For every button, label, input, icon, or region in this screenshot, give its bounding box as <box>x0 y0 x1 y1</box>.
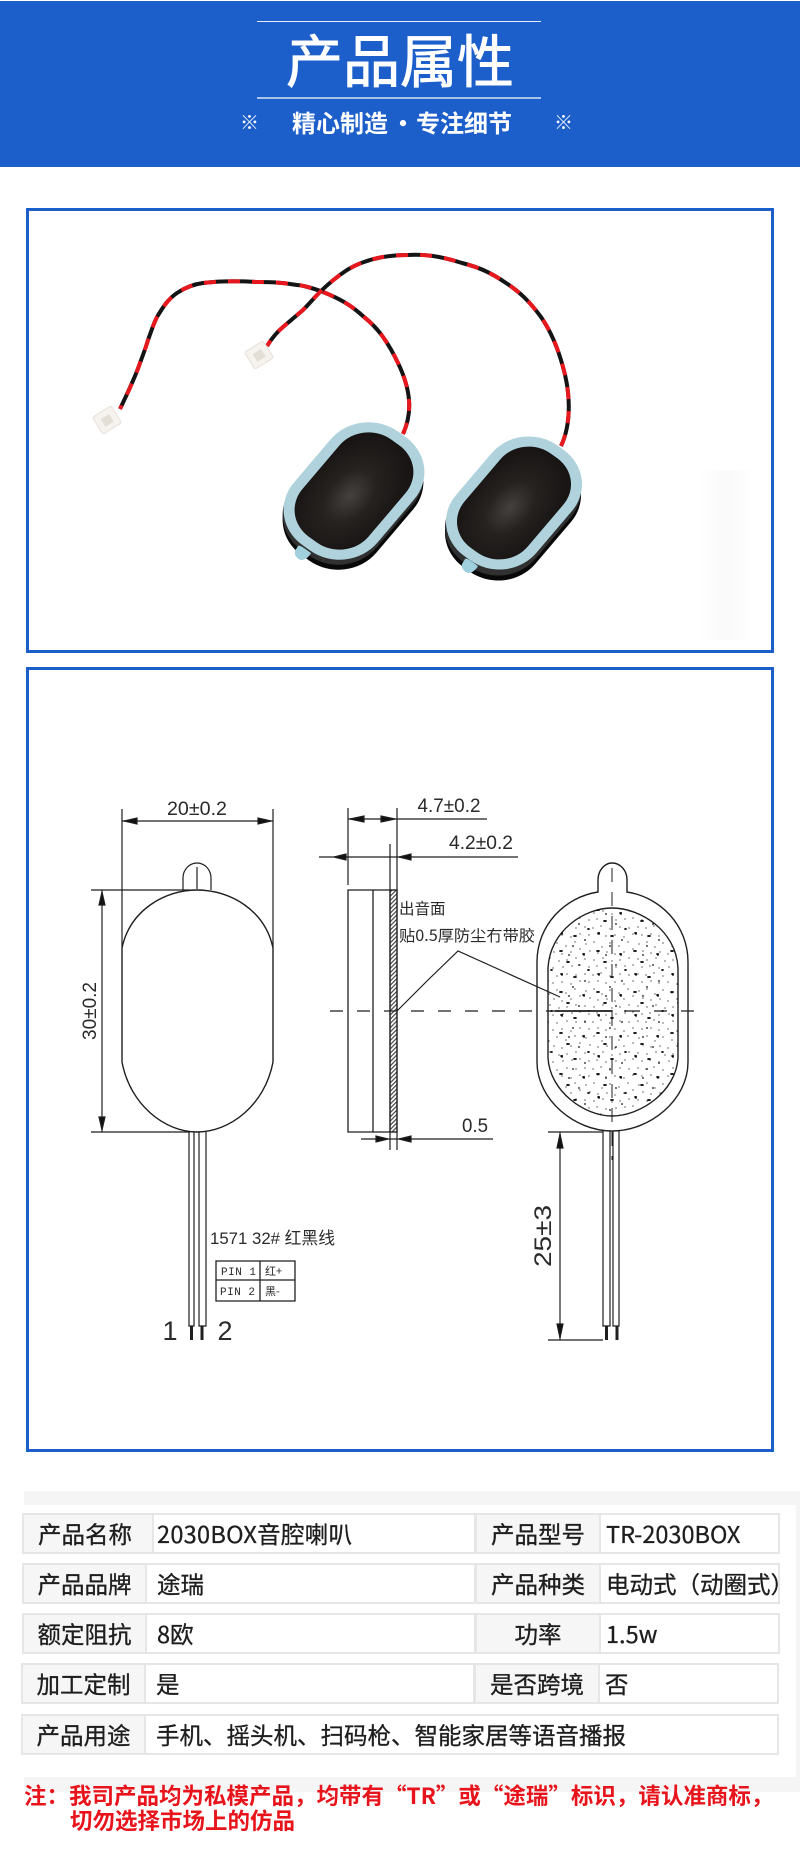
horizontal leader <box>555 1010 612 1012</box>
dimension 4.7 <box>348 796 487 890</box>
row: 品牌 / 种类: 途瑞 <box>157 1566 204 1600</box>
row: 定制 / 跨境: 否 <box>605 1666 628 1700</box>
side view <box>319 796 708 1150</box>
title: 产品属性 <box>286 17 514 99</box>
row: 品牌 / 种类: 产品品牌 <box>38 1566 132 1600</box>
speaker: right <box>426 419 601 598</box>
leader line <box>397 951 560 1011</box>
subtitle: · <box>391 104 415 139</box>
wire: right speaker <box>267 255 569 446</box>
connector: left <box>92 406 122 434</box>
row: 定制 / 跨境 <box>21 1663 779 1704</box>
dimension 4.2 <box>319 833 518 890</box>
subtitle: ※ <box>240 108 259 135</box>
row: 定制 / 跨境: 是 <box>156 1666 180 1700</box>
connector: right <box>244 341 274 369</box>
row: 品牌 / 种类 <box>22 1563 794 1604</box>
title rule bottom <box>257 97 541 99</box>
callout text: 贴0.5厚防尘冇带胶 <box>399 924 535 946</box>
dimension 25: 25±3 <box>530 1205 557 1267</box>
dimension 4.2: 4.2±0.2 <box>449 833 513 854</box>
row: 名称 / 型号: 产品名称 <box>38 1516 132 1550</box>
row: 定制 / 跨境: 是否跨境 <box>490 1666 584 1700</box>
panel: product photo <box>26 208 774 653</box>
row: 阻抗 / 功率: 1.5w <box>606 1616 657 1650</box>
speaker: left <box>263 404 444 588</box>
spec table <box>21 1513 794 1755</box>
back view <box>530 863 688 1340</box>
width dimension <box>122 799 273 948</box>
center line <box>330 1010 708 1012</box>
outer shell <box>537 863 688 1131</box>
dimension 4.7: 4.7±0.2 <box>418 796 480 817</box>
row: 用途 <box>21 1714 779 1755</box>
pin table: PIN 1 <box>221 1267 257 1279</box>
dimension 25 <box>530 1132 603 1340</box>
row: 名称 / 型号 <box>22 1513 780 1554</box>
speckle large dots <box>548 908 678 1116</box>
speckle fill <box>548 908 678 1116</box>
row: 名称 / 型号: 2030BOX音腔喇叭 <box>157 1516 352 1550</box>
height dimension <box>80 890 190 1132</box>
note: counterfeit warning: 切勿选择市场上的仿品 <box>70 1804 295 1836</box>
pin table: 红+ <box>265 1263 282 1279</box>
row: 名称 / 型号: TR-2030BOX <box>606 1516 740 1550</box>
row: 品牌 / 种类: 产品种类 <box>491 1566 585 1600</box>
dimension 0.5 <box>361 1116 493 1150</box>
solder tab <box>183 863 211 890</box>
height dimension: 30±0.2 <box>80 982 101 1040</box>
header banner <box>0 1 800 167</box>
front view <box>80 799 335 1346</box>
row: 名称 / 型号: 产品型号 <box>491 1516 585 1550</box>
table white area <box>0 1505 796 1777</box>
pin numbers <box>162 1316 233 1346</box>
lead wires <box>603 1131 619 1326</box>
table background band <box>24 1491 800 1792</box>
dimension 0.5: 0.5 <box>462 1116 488 1137</box>
callout text: 出音面 <box>399 897 446 919</box>
row: 阻抗 / 功率: 8欧 <box>157 1616 194 1650</box>
width dimension: 20±0.2 <box>167 799 227 820</box>
speaker outline <box>122 890 273 1132</box>
row: 用途: 手机、摇头机、扫码枪、智能家居等语音播报 <box>156 1717 626 1751</box>
pin table <box>216 1261 295 1301</box>
wire: left speaker <box>120 281 409 434</box>
pin table: 黑- <box>265 1283 280 1299</box>
subtitle <box>240 104 573 139</box>
subtitle: 精心制造 <box>292 104 388 139</box>
title rule top <box>257 21 541 22</box>
pin table: PIN 2 <box>220 1287 256 1299</box>
row: 阻抗 / 功率 <box>22 1613 780 1654</box>
pin numbers: 2 <box>217 1316 233 1346</box>
note: counterfeit warning: 注：我司产品均为私模产品，均带有“TR”或“途瑞”标识，请认准商标， <box>24 1779 773 1811</box>
note: counterfeit warning <box>24 1779 773 1836</box>
subtitle: ※ <box>554 108 573 135</box>
pin numbers: 1 <box>162 1316 178 1346</box>
lead wires <box>189 1132 206 1326</box>
vertical center line <box>611 868 613 1160</box>
callout text <box>399 897 535 946</box>
row: 定制 / 跨境: 加工定制 <box>36 1666 130 1700</box>
row: 阻抗 / 功率: 功率 <box>514 1616 562 1650</box>
wire label: 1571 32# 红黑线 <box>210 1229 335 1248</box>
row: 品牌 / 种类: 电动式（动圈式） <box>606 1566 794 1600</box>
panel: dimension drawing <box>26 667 774 1452</box>
row: 阻抗 / 功率: 额定阻抗 <box>38 1616 132 1650</box>
row: 用途: 产品用途 <box>36 1717 130 1751</box>
subtitle: 专注细节 <box>416 104 512 139</box>
